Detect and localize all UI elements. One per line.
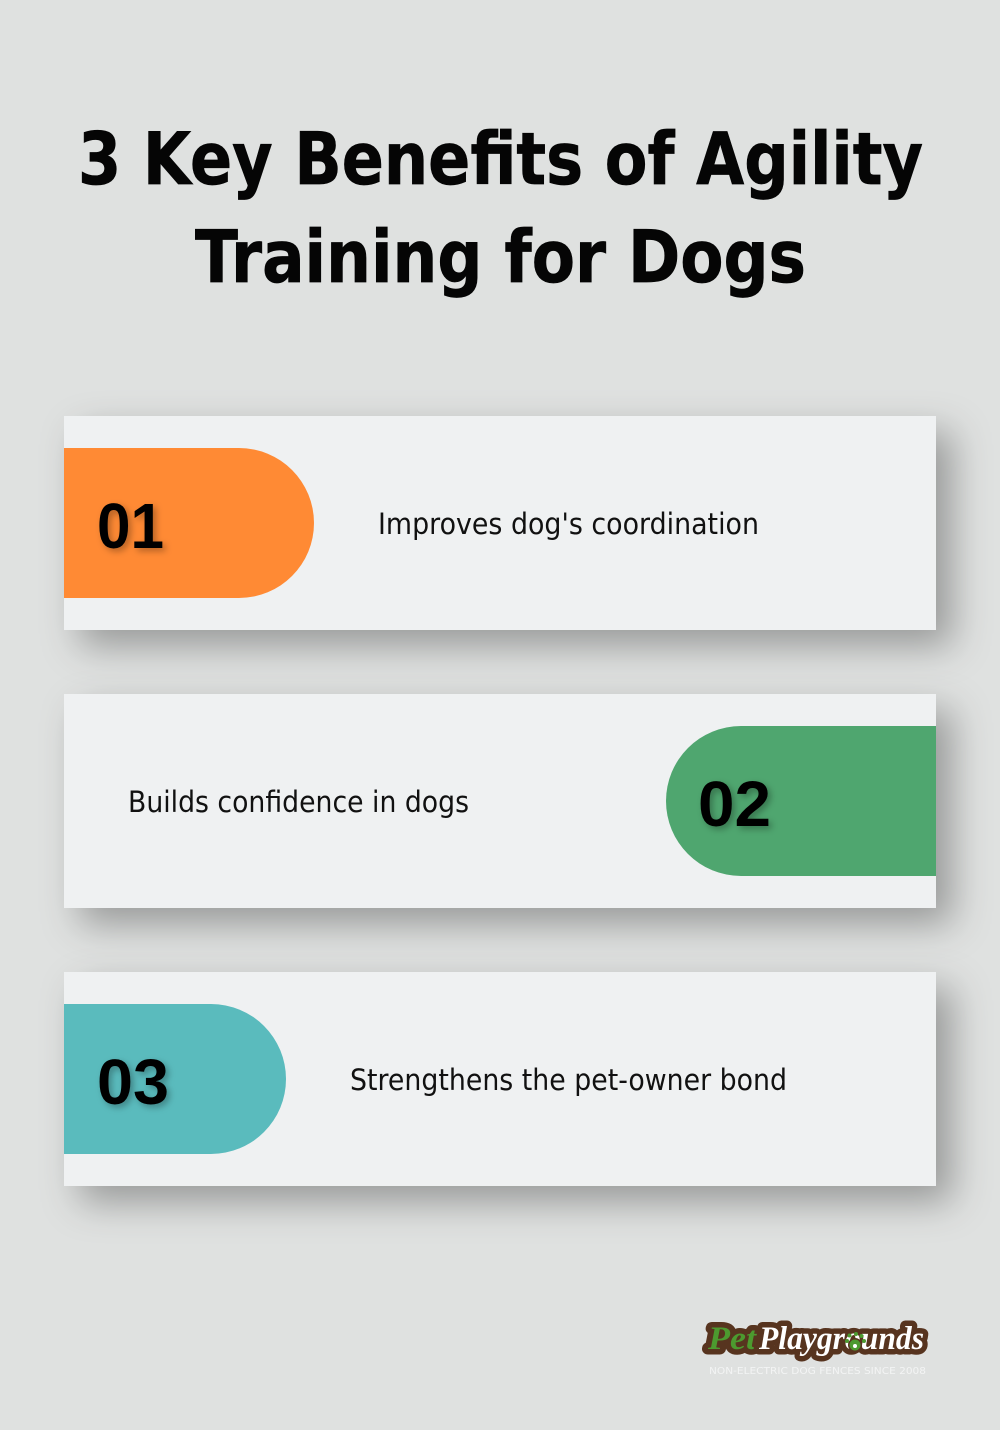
number 03: 03	[97, 1046, 169, 1118]
text: confidence: Builds confidence in dogs	[128, 785, 469, 819]
title: Training for Dogs	[195, 215, 806, 299]
title	[78, 117, 923, 299]
logo wordmark: Pet	[707, 1321, 757, 1357]
number 02: 02	[698, 768, 771, 840]
card background 02	[64, 694, 936, 908]
panel: benefit 03	[64, 972, 936, 1186]
orange number tab	[64, 448, 314, 598]
logo tagline: NON-ELECTRIC DOG FENCES SINCE 2008	[709, 1366, 926, 1377]
card background 03	[64, 972, 936, 1186]
text: bond: Strengthens the pet-owner bond	[350, 1063, 787, 1097]
icon: paw	[845, 1332, 866, 1352]
number 01: 01	[97, 490, 164, 562]
logo wordmark: Playgrounds	[758, 1321, 924, 1357]
panel: benefit 02	[64, 694, 936, 908]
teal number tab	[64, 1004, 286, 1154]
logo: Pet Playgrounds	[707, 1321, 926, 1377]
green number tab	[666, 726, 936, 876]
panel: benefit 01	[64, 416, 936, 630]
card background 01	[64, 416, 936, 630]
text: coordination: Improves dog's coordination	[378, 507, 759, 541]
